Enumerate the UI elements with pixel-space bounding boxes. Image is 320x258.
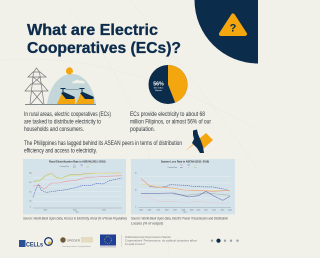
- text block: ECs provide electricity: population.: [130, 127, 155, 133]
- source: right chart: [131, 216, 228, 226]
- axis labels: 20: [135, 173, 137, 175]
- text block: rural areas: [24, 112, 111, 133]
- legend: Country/Year: [168, 166, 178, 169]
- axis labels: [135, 173, 232, 213]
- text block: ECs provide electricity: ECs provide electricity to about 68: [130, 112, 206, 118]
- logo: CELLs: [19, 238, 52, 248]
- pie chart: 56 percent: 56%: [153, 82, 164, 88]
- footer project description: the quality of service?: [125, 243, 145, 246]
- pie chart: 56 percent: Filipinos: [155, 90, 162, 92]
- pagination dots: [211, 239, 239, 243]
- text block: Philippines lag: The Philippines has lagged behind its ASEAN peers in terms of distribution: [24, 141, 182, 147]
- corner circle with warning icon: [194, 0, 258, 64]
- icon: sun: [66, 67, 73, 75]
- icon: lineman with yellow panel: [185, 130, 213, 153]
- footer project description: Political-Economic Determinants of Electric: [125, 236, 172, 239]
- axis labels: 40: [29, 201, 31, 203]
- axis labels: 0: [135, 206, 136, 208]
- title: Cooperatives (ECs)?: [27, 40, 181, 57]
- axis labels: 0: [30, 207, 31, 209]
- axis labels: 2014: [73, 210, 77, 212]
- axis labels: [29, 173, 106, 213]
- source: right chart: Source: World Bank Open Data, Electric Power Transmission and Distribution: [131, 216, 228, 220]
- axis labels: 2014: [228, 209, 232, 211]
- icon: house right: [76, 88, 94, 104]
- icon: warning triangle: ?: [230, 22, 237, 34]
- text block: Philippines lag: efficiency and access to electricity.: [24, 148, 97, 154]
- text block: rural areas: households and consumers.: [24, 127, 84, 133]
- chart: system loss rate: [131, 159, 235, 214]
- axis labels: 60: [29, 191, 31, 193]
- pie chart: 56 percent: 68.6 million: [154, 88, 163, 90]
- text block: rural areas: In rural areas, electric cooperatives (ECs): [24, 112, 111, 118]
- text block: ECs provide electricity: [130, 112, 211, 133]
- logo: partner institute: Convening Leaders, Creating Solutions: [62, 245, 91, 248]
- line series: [141, 179, 230, 203]
- axis labels: 2011: [204, 209, 208, 211]
- text block: ECs provide electricity: million Filipinos, or almost 56% of our: [130, 120, 211, 126]
- line series: [33, 173, 122, 197]
- axis labels: Year: [183, 211, 187, 213]
- axis labels: Year: [75, 211, 79, 213]
- title: [27, 22, 181, 57]
- footer project description: [125, 236, 197, 246]
- axis labels: 2010: [196, 209, 200, 211]
- axis labels: 10: [135, 189, 137, 191]
- axis labels: 2012: [212, 209, 216, 211]
- pie chart: 56 percent: [148, 65, 188, 104]
- footer project description: Cooperatives' Performance: do political dynamics affect: [125, 240, 197, 242]
- axis labels: 2007: [173, 209, 177, 211]
- axis labels: 2005: [156, 209, 160, 211]
- axis labels: 2008: [181, 209, 185, 211]
- source: right chart: Losses (% of output): [131, 222, 163, 226]
- illustration: transmission tower and houses: [25, 67, 96, 105]
- text block: Philippines lag: [24, 141, 182, 154]
- axis labels: 80: [29, 182, 31, 184]
- logo: partner institute: [60, 237, 93, 248]
- source: left chart: Source: World Bank Open Data, Access to Electricity, Rural (% of Rural Population): [23, 216, 127, 220]
- logo: European Union flag: [100, 234, 116, 247]
- icon: house left: [57, 88, 75, 104]
- chart: rural electrification rate: [23, 159, 126, 214]
- icon: transmission tower: [25, 68, 48, 104]
- text block: rural areas: are tasked to distribute electricity to: [24, 120, 102, 126]
- axis labels: 2012: [43, 210, 47, 212]
- axis labels: 100: [29, 173, 32, 175]
- logo: CELLs: CELLs: [26, 242, 44, 248]
- chart title: Rural Electrification Rate in ASEAN (2011–2016): [49, 160, 106, 163]
- legend: Country/Year: [60, 165, 70, 168]
- chart title: System Loss Rate in ASEAN (2011–2016): [161, 160, 209, 163]
- axis labels: 2004: [147, 209, 151, 211]
- axis labels: 2006: [165, 209, 169, 211]
- axis labels: 2009: [190, 209, 194, 211]
- logo: partner institute: SPEDER: [67, 238, 81, 242]
- axis labels: 2016: [102, 210, 106, 212]
- title: What are Electric: [27, 22, 158, 39]
- axis labels: 2003: [139, 209, 143, 211]
- axis labels: 2013: [220, 209, 224, 211]
